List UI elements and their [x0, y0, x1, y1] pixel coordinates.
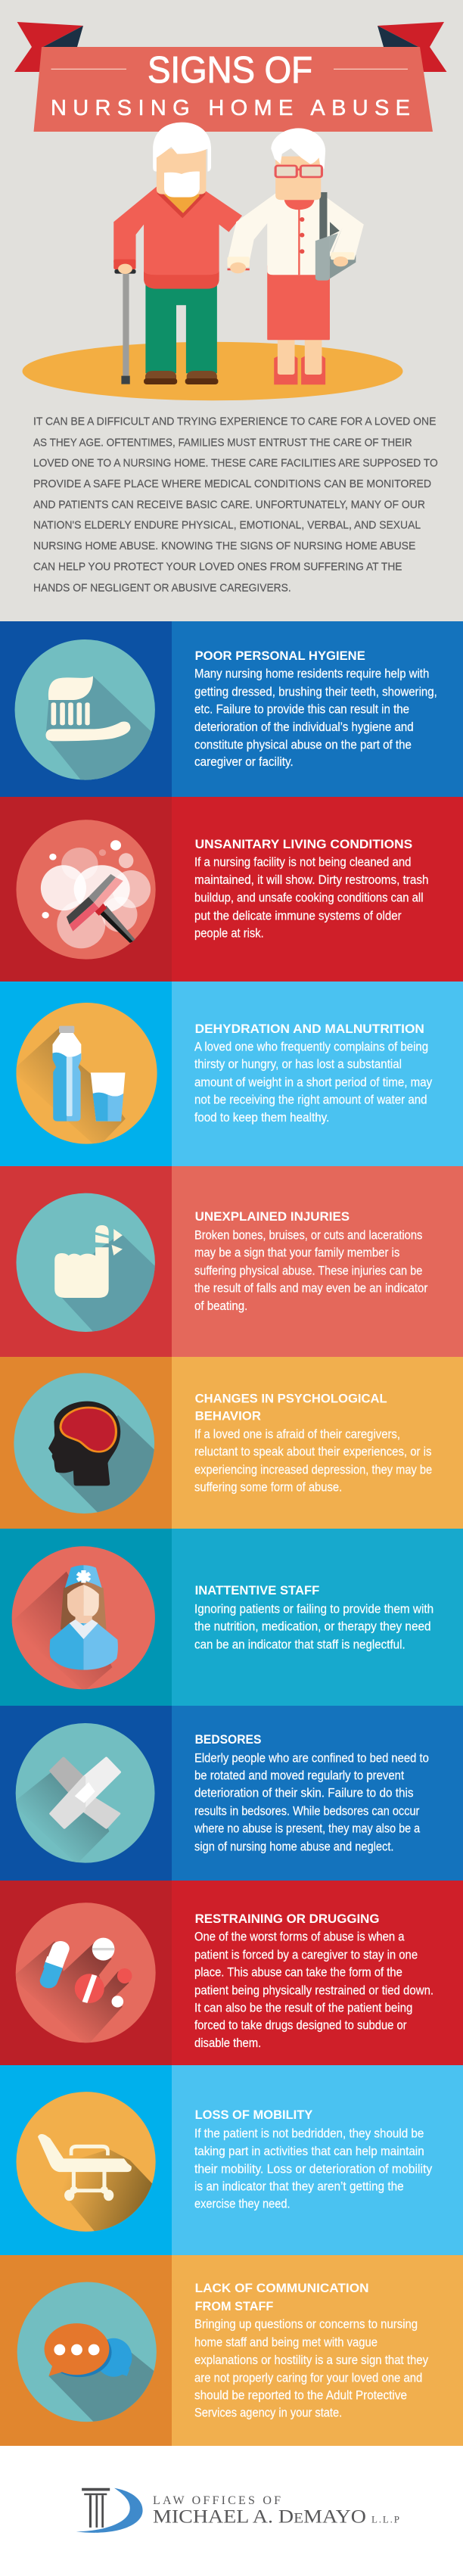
text: changes in psychological behavior: suffering some form of abuse. — [194, 1479, 342, 1494]
text: dehydration and malnutrition: thirsty or hungry, or has lost a substantial — [194, 1057, 402, 1072]
icon: column and crescent logo mark — [76, 2488, 143, 2533]
text: bedsores: be rotated and moved regularly to prevent — [194, 1768, 404, 1782]
panel: unexplained injuries — [0, 1166, 463, 1357]
text: inattentive staff: Ignoring patients or failing to provide them with — [194, 1601, 433, 1616]
text: lack of communication from staff — [194, 2282, 429, 2420]
text: loss of mobility: taking part in activities that can help maintain — [194, 2144, 424, 2158]
icon: reclining wheeled bed — [16, 2092, 157, 2235]
text: loss of mobility — [194, 2108, 433, 2211]
intro paragraph: NATION'S ELDERLY ENDURE PHYSICAL, EMOTIONAL, VERBAL, AND SEXUAL — [33, 518, 421, 531]
text: unsanitary living conditions — [194, 838, 428, 940]
text: loss of mobility: exercise they need. — [194, 2197, 291, 2211]
text: restraining or drugging: forced to take drugs designed to subdue or — [194, 2018, 407, 2032]
text: changes in psychological behavior — [194, 1392, 432, 1494]
icon: crossed bandages — [12, 1723, 155, 1864]
text: loss of mobility: If the patient is not bedridden, they should be — [194, 2126, 424, 2140]
icon: nurse — [9, 1546, 155, 1691]
intro paragraph: AND PATIENTS CAN RECEIVE BASIC CARE. UNFORTUNATELY, MANY OF OUR — [33, 498, 425, 511]
text: inattentive staff: can be an indicator that staff is neglectful. — [194, 1637, 406, 1651]
text: unsanitary living conditions: If a nursing facility is not being cleaned and — [194, 854, 412, 869]
text: bedsores: sign of nursing home abuse and neglect. — [194, 1839, 393, 1853]
title line 1: SIGNS OF — [148, 50, 312, 91]
panel: restraining or drugging — [0, 1881, 463, 2065]
firm suffix: L.L.P — [371, 2514, 399, 2525]
firm name line 1: LAW OFFICES OF — [153, 2494, 281, 2507]
text: bedsores: where no abuse is present, they may also be a — [194, 1821, 421, 1835]
intro paragraph — [33, 415, 438, 594]
text: dehydration and malnutrition: DEHYDRATION AND MALNUTRITION — [195, 1022, 424, 1036]
text: dehydration and malnutrition: amount of weight in a short period of time, may — [194, 1075, 433, 1089]
text: inattentive staff: the nutrition, medication, or therapy they need — [194, 1619, 431, 1634]
icon: pills — [12, 1902, 156, 2046]
text: poor personal hygiene: etc. Failure to provide this can result in the — [194, 702, 409, 716]
panel: poor personal hygiene — [0, 621, 463, 797]
text: unexplained injuries: the result of falls and may even be an indicator — [194, 1281, 428, 1296]
text: loss of mobility: is an indicator that they aren’t getting the — [194, 2179, 404, 2194]
text: lack of communication from staff: FROM STAFF — [195, 2300, 273, 2313]
footer: law office logo — [0, 2446, 463, 2576]
text: unexplained injuries — [194, 1210, 428, 1313]
text: unsanitary living conditions: put the delicate immune systems of older — [194, 908, 402, 922]
text: unexplained injuries: may be a sign that your family member is — [194, 1246, 399, 1260]
intro paragraph: LOVED ONE TO A NURSING HOME. THESE CARE FACILITIES ARE SUPPOSED TO — [33, 456, 438, 469]
text: dehydration and malnutrition: A loved one who frequently complains of being — [194, 1039, 428, 1053]
figure: elderly woman — [228, 128, 364, 384]
title banner — [14, 22, 446, 132]
intro paragraph: AS THEY AGE. OFTENTIMES, FAMILIES MUST ENTRUST THE CARE OF THEIR — [33, 436, 412, 449]
panel: loss of mobility — [0, 2065, 463, 2255]
text: unsanitary living conditions: people at risk. — [194, 926, 264, 940]
illustration: elderly couple — [23, 123, 402, 400]
text: restraining or drugging: patient is forced by a caregiver to stay in one — [194, 1947, 418, 1962]
text: restraining or drugging: disable them. — [194, 2036, 261, 2050]
intro paragraph: IT CAN BE A DIFFICULT AND TRYING EXPERIENCE TO CARE FOR A LOVED ONE — [33, 415, 436, 428]
text: lack of communication from staff: explanations or hostility is a sure sign that they — [194, 2353, 429, 2367]
text: bedsores: Elderly people who are confined to bed need to — [194, 1750, 429, 1765]
text: inattentive staff — [194, 1584, 433, 1651]
text: dehydration and malnutrition — [194, 1022, 433, 1125]
intro paragraph: CAN HELP YOU PROTECT YOUR LOVED ONES FROM SUFFERING AT THE — [33, 560, 402, 573]
text: poor personal hygiene: POOR PERSONAL HYGIENE — [195, 649, 365, 663]
text: lack of communication from staff: home staff and being met with vague — [194, 2335, 378, 2349]
text: lack of communication from staff: Bringing up questions or concerns to nursing — [194, 2317, 418, 2332]
icon: soap bubbles and squeegee — [16, 820, 156, 960]
text: unexplained injuries: of beating. — [194, 1299, 247, 1313]
ribbon body — [33, 47, 433, 132]
icon: toothbrush — [15, 639, 157, 789]
text: poor personal hygiene: Many nursing home residents require help with — [194, 666, 429, 680]
intro paragraph: PROVIDE A SAFE PLACE WHERE MEDICAL CONDITIONS CAN BE MONITORED — [33, 478, 431, 490]
text: bedsores: deterioration of their skin. Failure to do this — [194, 1785, 414, 1800]
ribbon tail: left — [14, 22, 83, 72]
text: unexplained injuries: UNEXPLAINED INJURIES — [195, 1210, 350, 1224]
text: restraining or drugging: place. This abuse can take the form of the — [194, 1965, 402, 1979]
text: changes in psychological behavior: reluctant to speak about their experiences, or is — [194, 1445, 431, 1459]
text: lack of communication from staff: should be reported to the Adult Protective — [194, 2388, 407, 2403]
text: poor personal hygiene: getting dressed, brushing their teeth, showering, — [194, 684, 437, 698]
text: bedsores: BEDSORES — [195, 1733, 261, 1747]
text: lack of communication from staff: LACK OF COMMUNICATION — [195, 2282, 369, 2295]
text: unexplained injuries: Broken bones, bruises, or cuts and lacerations — [194, 1227, 422, 1242]
intro paragraph: NURSING HOME ABUSE. KNOWING THE SIGNS OF NURSING HOME ABUSE — [33, 540, 415, 552]
icon: speech bubbles — [17, 2282, 157, 2423]
icon: water bottle and glass — [12, 1003, 157, 1148]
icon: bandaged finger — [16, 1193, 157, 1337]
text: changes in psychological behavior: CHANGES IN PSYCHOLOGICAL — [195, 1392, 387, 1405]
figure: elderly man — [113, 123, 242, 384]
text: loss of mobility: their mobility. Loss or deterioration of mobility — [194, 2161, 433, 2176]
firm name line 2: MICHAEL A. D EMAYO — [153, 2507, 366, 2528]
intro paragraph: HANDS OF NEGLIGENT OR ABUSIVE CAREGIVERS. — [33, 581, 291, 594]
text: bedsores — [194, 1733, 429, 1853]
text: restraining or drugging: It can also be the result of the patient being — [194, 2000, 412, 2014]
text: unsanitary living conditions: maintained, it will show. Dirty restrooms, trash — [194, 873, 428, 887]
title line 2: NURSING HOME ABUSE — [51, 96, 410, 120]
text: lack of communication from staff: Services agency in your state. — [194, 2406, 342, 2420]
text: inattentive staff: INATTENTIVE STAFF — [195, 1584, 319, 1598]
text: unsanitary living conditions: buildup, and unsafe cooking conditions can all — [194, 890, 424, 904]
text: changes in psychological behavior: BEHAVIOR — [195, 1410, 261, 1423]
text: restraining or drugging: RESTRAINING OR DRUGGING — [195, 1912, 380, 1926]
text: dehydration and malnutrition: food to keep them healthy. — [194, 1110, 329, 1125]
icon: head with brain — [14, 1373, 157, 1516]
text: bedsores: results in bedsores. While bedsores can occur — [194, 1803, 420, 1818]
panel: unsanitary living conditions — [0, 797, 463, 982]
text: poor personal hygiene — [194, 649, 437, 769]
text: unsanitary living conditions: UNSANITARY LIVING CONDITIONS — [195, 838, 412, 851]
panel: inattentive staff — [0, 1529, 463, 1706]
panel: changes in psychological behavior — [0, 1357, 463, 1529]
ribbon tail: right — [378, 22, 446, 72]
text: lack of communication from staff: are not properly caring for your loved one and — [194, 2370, 422, 2385]
text: restraining or drugging: patient being physically restrained or tied down. — [194, 1983, 433, 1997]
panel: lack of communication from staff — [0, 2255, 463, 2446]
ground ellipse — [23, 342, 402, 400]
panel: bedsores — [0, 1706, 463, 1881]
text: changes in psychological behavior: If a loved one is afraid of their caregivers, — [194, 1426, 400, 1441]
text: dehydration and malnutrition: not be receiving the right amount of water and — [194, 1093, 427, 1107]
text: poor personal hygiene: deterioration of the individual’s hygiene and — [194, 720, 414, 734]
text: loss of mobility: LOSS OF MOBILITY — [195, 2108, 312, 2122]
text: restraining or drugging: One of the worst forms of abuse is when a — [194, 1929, 405, 1943]
text: poor personal hygiene: caregiver or facility. — [194, 754, 294, 769]
text: restraining or drugging — [194, 1912, 433, 2050]
text: poor personal hygiene: constitute physical abuse on the part of the — [194, 737, 412, 751]
panel: dehydration and malnutrition — [0, 982, 463, 1166]
text: changes in psychological behavior: experiencing increased depression, they may be — [194, 1462, 432, 1476]
text: unexplained injuries: suffering physical abuse. These injuries can be — [194, 1263, 422, 1277]
